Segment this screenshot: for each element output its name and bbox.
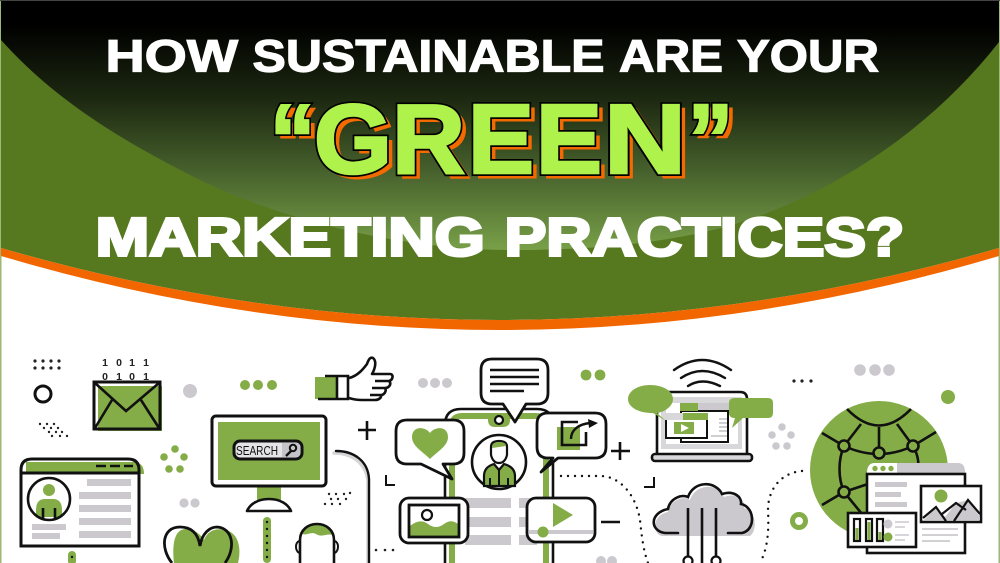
title word: GREEN: N bbox=[604, 84, 686, 194]
green dot cluster bbox=[160, 445, 188, 473]
dotted stem bbox=[263, 517, 271, 563]
title word: GREEN: E bbox=[541, 88, 607, 198]
icon: text chat bubble bbox=[481, 359, 548, 422]
dots near connector bbox=[324, 492, 394, 551]
icon: landscape picture card bbox=[921, 486, 981, 522]
title word: GREEN: R bbox=[392, 84, 465, 194]
title word: GREEN: ” bbox=[688, 84, 733, 194]
icon: profile window bbox=[21, 459, 144, 546]
green dots pair bbox=[581, 370, 605, 380]
icon: person avatar bbox=[472, 435, 526, 489]
title word: GREEN: N bbox=[609, 88, 691, 198]
grey dot bbox=[183, 384, 197, 398]
minus sign bbox=[601, 521, 620, 523]
green speech bubble right bbox=[729, 398, 773, 428]
grey dots pair bbox=[179, 498, 200, 508]
icon: image card bbox=[400, 498, 468, 543]
binary digits: 1 bbox=[116, 371, 122, 383]
binary digits bbox=[102, 357, 149, 383]
icon: heart bbox=[164, 527, 239, 563]
title word: GREEN: E bbox=[536, 84, 602, 194]
icon: search monitor: SEARCH bbox=[236, 443, 278, 458]
title word: GREEN: ” bbox=[688, 84, 733, 194]
title line 3: MARKETING bbox=[96, 208, 485, 268]
connector line bbox=[334, 451, 369, 563]
binary digits: 1 bbox=[143, 371, 149, 383]
title word: GREEN: ” bbox=[693, 88, 738, 198]
dotted curve right of cloud bbox=[760, 471, 802, 563]
black dots bbox=[792, 379, 813, 383]
title word: GREEN: G bbox=[319, 88, 397, 198]
binary digits: 0 bbox=[102, 371, 108, 383]
icon: share bubble bbox=[537, 413, 606, 472]
green dots bbox=[240, 380, 277, 390]
icon: web browser window bbox=[867, 463, 965, 553]
title word: GREEN: E bbox=[473, 88, 539, 198]
icon: cloud bbox=[654, 484, 755, 563]
header banner bbox=[0, 0, 1000, 330]
grey dots centre bbox=[418, 378, 452, 388]
dotted stem lower left bbox=[68, 551, 76, 563]
icon: person head bbox=[296, 524, 338, 563]
icon: video card bbox=[527, 498, 595, 542]
binary digits: 0 bbox=[129, 371, 135, 383]
title word: GREEN: “ bbox=[275, 88, 320, 198]
green speech bubble left bbox=[628, 385, 673, 421]
green ring bbox=[792, 514, 806, 528]
title line 1: ARE bbox=[619, 30, 723, 82]
icon: envelope bbox=[94, 382, 162, 431]
title word: GREEN bbox=[270, 84, 738, 198]
title word: GREEN: G bbox=[314, 84, 392, 194]
icon: stats card bbox=[848, 513, 916, 547]
title word: GREEN: “ bbox=[270, 84, 315, 194]
title line 3 bbox=[96, 208, 904, 268]
dotted curve left of cloud bbox=[561, 476, 648, 563]
icon: smartphone bbox=[445, 409, 553, 563]
corner brackets bbox=[386, 475, 654, 487]
icon: laptop bbox=[652, 392, 752, 461]
binary digits: 1 bbox=[102, 357, 108, 369]
ring bbox=[35, 386, 51, 402]
title line 3: PRACTICES? bbox=[505, 208, 904, 268]
title line 1: SUSTAINABLE bbox=[252, 30, 604, 82]
grey dot cluster bbox=[768, 423, 795, 450]
icon: thumbs up bbox=[315, 358, 393, 400]
binary digits: 1 bbox=[129, 357, 135, 369]
title line 1: HOW bbox=[106, 30, 239, 82]
title word: GREEN: E bbox=[468, 84, 534, 194]
title word: GREEN: E bbox=[536, 84, 602, 194]
plus sign bbox=[358, 421, 376, 440]
title line 1 bbox=[106, 30, 879, 82]
title word: GREEN: G bbox=[314, 84, 392, 194]
grey dots bbox=[854, 364, 895, 376]
title word: GREEN: N bbox=[604, 84, 686, 194]
decorative dots, top left bbox=[33, 359, 68, 437]
title word: GREEN: R bbox=[392, 84, 465, 194]
title word: GREEN: “ bbox=[270, 84, 315, 194]
binary digits: 1 bbox=[143, 357, 149, 369]
icon: globe bbox=[810, 401, 948, 539]
title word: GREEN: R bbox=[397, 88, 470, 198]
icon: heart bubble bbox=[396, 420, 464, 479]
plus sign right bbox=[611, 442, 630, 460]
grey dots pair lower bbox=[596, 556, 617, 563]
green dot bbox=[941, 390, 955, 404]
binary digits: 0 bbox=[116, 357, 122, 369]
icon: wifi signal bbox=[674, 360, 731, 386]
title line 1: YOUR bbox=[737, 30, 879, 82]
icon: search monitor bbox=[212, 416, 326, 511]
title word: GREEN: E bbox=[468, 84, 534, 194]
